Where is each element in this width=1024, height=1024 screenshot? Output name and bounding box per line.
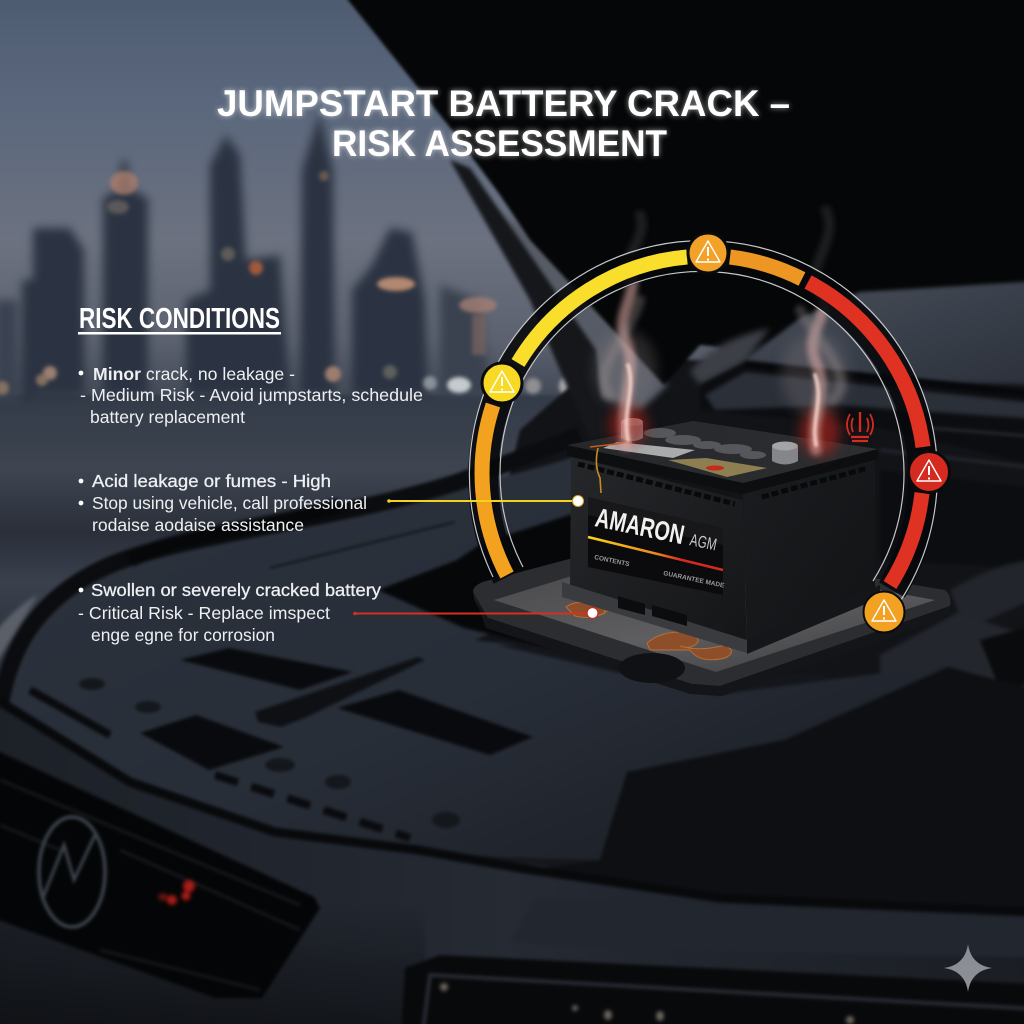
- lower left shading: [0, 900, 425, 1024]
- dark track: [483, 257, 923, 590]
- title: JUMPSTART BATTERY CRACK –: [217, 83, 790, 124]
- vents: [578, 464, 868, 504]
- sky: [0, 0, 720, 405]
- hood slots: [140, 648, 533, 770]
- main hood panel: [0, 455, 950, 860]
- labels on top: [603, 442, 695, 458]
- AMARON AGM label: AMARON: [593, 502, 687, 550]
- red connector line: [353, 608, 598, 618]
- AMARON AGM label: CONTENTS: [594, 554, 631, 568]
- water and ground: [0, 395, 720, 645]
- text block: acid leakage: rodaise aodaise assistance: [92, 515, 304, 535]
- battery base flange: [562, 582, 880, 654]
- red upper-right arc: [808, 282, 923, 447]
- text block: acid leakage: Stop using vehicle, call professional: [92, 493, 367, 513]
- text block: minor crack: [79, 364, 423, 427]
- yellow connector line: [387, 496, 584, 506]
- hood fasteners: [79, 678, 460, 828]
- gray hood wedge behind strut: [486, 205, 668, 410]
- battery tray: [473, 558, 950, 696]
- hood rim: [0, 435, 580, 745]
- warning icon: red: [908, 452, 950, 492]
- illustration: AMARON battery on tray: [473, 418, 950, 696]
- text block: swollen battery: Swollen or severely cracked battery: [91, 580, 381, 600]
- AMARON AGM label: [588, 497, 725, 595]
- AMARON AGM label: AGM: [688, 530, 718, 554]
- orange lower-left arc: [482, 405, 507, 575]
- car badge: [39, 817, 105, 927]
- text block: swollen battery: [78, 580, 381, 645]
- windshield: [745, 280, 1024, 385]
- text block: acid leakage: Acid leakage or fumes - High: [92, 471, 331, 491]
- title: RISK ASSESSMENT: [332, 123, 667, 164]
- hood strut: [450, 160, 606, 440]
- text block: swollen battery: enge egne for corrosion: [91, 625, 275, 645]
- alert icon: red signal: [847, 412, 873, 441]
- caps: [644, 428, 766, 459]
- text block: swollen battery: - Critical Risk - Replace imspect: [78, 603, 330, 623]
- engine bay dark background: [470, 360, 1024, 700]
- red reflections on grille: [158, 880, 195, 905]
- terminals: [621, 418, 798, 464]
- text block: acid leakage: [79, 471, 367, 535]
- orange top arc: [730, 257, 802, 279]
- inner thin ring: [500, 271, 904, 581]
- hood underside: [320, 0, 1024, 385]
- acid puddles: [566, 603, 732, 660]
- right hoses and covers: [950, 558, 1024, 630]
- crack with acid: [596, 448, 601, 493]
- heading: risk conditions: RISK CONDITIONS: [79, 303, 280, 335]
- red lower-right arc: [890, 493, 922, 585]
- blurred city skyline: [0, 112, 490, 400]
- battery front face: [570, 456, 747, 652]
- right fender strip: [510, 897, 1024, 958]
- warning icon: yellow: [482, 363, 522, 403]
- outer thin ring: [469, 241, 937, 600]
- smoke plumes rising from terminals: [593, 210, 849, 456]
- black well around tray: [378, 505, 600, 660]
- title: [217, 83, 790, 164]
- wipers and cowl: [700, 362, 1024, 470]
- hood bar: [255, 657, 425, 727]
- text block: minor crack: battery replacement: [90, 407, 245, 427]
- battery right face: [743, 458, 875, 652]
- AMARON AGM label: GUARANTEE MADE: [663, 570, 725, 590]
- headlight: [400, 955, 1024, 1024]
- front grille: [0, 736, 320, 998]
- sparkle watermark: [944, 944, 992, 992]
- yellow arc: [518, 257, 687, 363]
- warning icon: top orange: [688, 233, 728, 273]
- text block: minor crack: - Medium Risk - Avoid jumpstarts, schedule: [80, 385, 423, 405]
- lower fender: [0, 680, 1024, 1024]
- risk gauge ring: [469, 241, 937, 600]
- skyline lights: [0, 171, 579, 396]
- warning icon: bottom orange: [864, 592, 904, 632]
- dark center panel: [530, 667, 1024, 915]
- text block: minor crack: Minor crack, no leakage -: [93, 364, 295, 384]
- battery top: [567, 421, 878, 494]
